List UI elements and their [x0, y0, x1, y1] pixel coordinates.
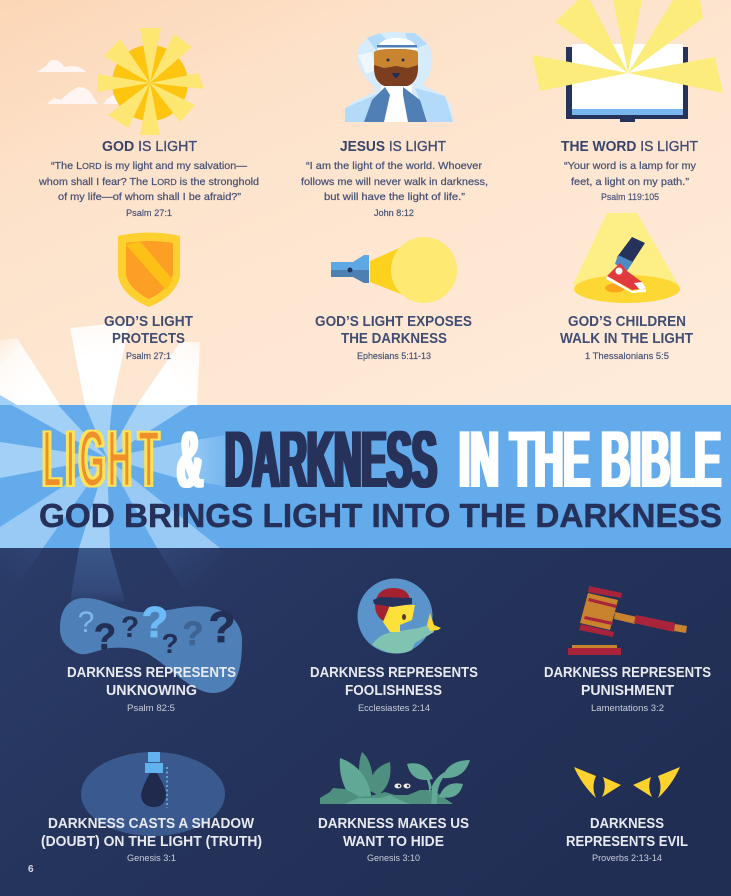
- reference: Proverbs 2:13-14: Proverbs 2:13-14: [592, 853, 662, 864]
- heading: darkness represents evil: REPRESENTS EVIL: [566, 834, 688, 850]
- reference: 1 Thessalonians 5:5: 1 Thessalonians 5:5: [585, 351, 669, 362]
- heading: darkness represents unknowing: UNKNOWING: [106, 683, 197, 699]
- verse: John 8:12: John 8:12: [374, 208, 414, 219]
- icon: thought blob with question marks: [60, 598, 242, 693]
- verse: Psalm 119:105: Psalm 119:105: [601, 192, 659, 203]
- verse: John 8:12: but will have the light of life.”: [324, 191, 466, 203]
- heading: God's light exposes the darkness: GOD’S LIGHT EXPOSES: [315, 314, 472, 330]
- icon: sneaker in spotlight: [573, 213, 680, 303]
- heading: darkness represents unknowing: DARKNESS REPRESENTS: [67, 665, 236, 681]
- heading: darkness makes us want to hide: DARKNESS MAKES US: [318, 816, 469, 832]
- verse: Psalm 119:105: [564, 160, 697, 203]
- heading: darkness represents foolishness: [310, 665, 478, 699]
- title: Light & Darkness in the Bible: DARKNESS: [225, 415, 437, 505]
- icon: thought blob with question marks: ?: [209, 603, 235, 652]
- verse: Psalm 119:105: feet, a light on my path.”: [571, 176, 690, 188]
- reference: Psalm 82:5: Psalm 82:5: [127, 703, 175, 714]
- heading: darkness represents punishment: PUNISHMENT: [581, 683, 674, 699]
- heading: God's children walk in the light: GOD’S CHILDREN: [568, 314, 686, 330]
- verse: Psalm 27:1: [38, 160, 259, 219]
- icon: flashlight beam: [331, 237, 457, 303]
- icon: dark lightbulb in shadow: [81, 752, 225, 836]
- reference: Genesis 3:1: Genesis 3:1: [127, 853, 176, 864]
- heading: darkness casts a shadow: DARKNESS CASTS A SHADOW: [48, 816, 254, 832]
- heading: darkness represents punishment: DARKNESS REPRESENTS: [544, 665, 711, 681]
- background: blue title band: [0, 405, 731, 548]
- heading: darkness represents punishment: [544, 665, 711, 699]
- panel: God's light protects: [104, 232, 193, 362]
- icon: yellow eyes: [574, 767, 680, 798]
- panel: darkness represents punishment: [544, 586, 711, 714]
- panel: God's light exposes the darkness: [315, 237, 472, 362]
- panel: darkness represents unknowing: [60, 598, 242, 714]
- icon: clouds: [37, 60, 125, 104]
- heading: darkness represents unknowing: [67, 665, 236, 699]
- title: Light & Darkness in the Bible: &: [177, 415, 203, 505]
- panel: darkness casts a shadow: [41, 752, 262, 864]
- heading: darkness represents evil: [566, 816, 688, 850]
- icon: shield: [118, 232, 180, 307]
- icon: open book with rays: [532, 0, 723, 122]
- heading: God's light protects: GOD’S LIGHT: [104, 314, 193, 330]
- panel: God's children walk in the light: [560, 213, 693, 362]
- verse: Psalm 119:105: “Your word is a lamp for my: [564, 160, 697, 172]
- heading: darkness represents foolishness: FOOLISHNESS: [345, 683, 442, 699]
- icon: sun: [97, 28, 204, 135]
- verse: Psalm 27:1: of my life—of whom shall I be afraid?”: [58, 191, 242, 203]
- icon: thought blob with question marks: ?: [161, 628, 179, 659]
- heading: darkness makes us want to hide: WANT TO HIDE: [343, 834, 444, 850]
- verse: John 8:12: follows me will never walk in darkness,: [301, 176, 488, 188]
- light burst rays across the three zones: [0, 322, 265, 602]
- icon: thought blob with question marks: ?: [94, 616, 116, 657]
- verse: John 8:12: [301, 160, 488, 219]
- heading: God's children walk in the light: WALK IN THE LIGHT: [560, 331, 693, 347]
- icon: eyes hiding in bushes: [320, 752, 470, 804]
- heading: darkness casts a shadow: [41, 816, 262, 850]
- heading: darkness represents foolishness: DARKNESS REPRESENTS: [310, 665, 478, 681]
- heading: God's light exposes the darkness: [315, 314, 472, 347]
- heading: God's children walk in the light: [560, 314, 693, 347]
- icon: thought blob with question marks: ?: [142, 598, 168, 647]
- reference: Psalm 27:1: Psalm 27:1: [126, 351, 171, 362]
- reference: Ephesians 5:11-13: Ephesians 5:11-13: [357, 351, 431, 362]
- verse: Psalm 27:1: Psalm 27:1: [126, 208, 172, 219]
- reference: Ecclesiastes 2:14: Ecclesiastes 2:14: [358, 703, 430, 714]
- panel: darkness represents evil: [566, 767, 688, 864]
- heading: darkness represents evil: DARKNESS: [590, 816, 664, 832]
- icon: thought blob with question marks: ?: [121, 611, 139, 644]
- page number: 6: [28, 864, 34, 875]
- heading: God's light exposes the darkness: THE DARKNESS: [341, 331, 447, 347]
- icon: thought blob with question marks: ?: [183, 615, 203, 653]
- heading: God's light protects: [104, 314, 193, 347]
- heading: darkness makes us want to hide: [318, 816, 469, 850]
- verse: Psalm 27:1: “The LORD is my light and my salvation—: [51, 160, 248, 172]
- heading: God's light protects: PROTECTS: [112, 331, 185, 347]
- background: navy lower half: [0, 548, 731, 896]
- heading: God is light: GOD IS LIGHT: [102, 139, 197, 155]
- reference: Genesis 3:10: Genesis 3:10: [367, 853, 420, 864]
- title: Light & Darkness in the Bible: LIGHT: [43, 417, 159, 502]
- icon: gavel: [568, 586, 687, 655]
- panel: darkness makes us want to hide: [318, 752, 470, 864]
- verse: Psalm 27:1: whom shall I fear? The L ORD is the stronghold: [38, 176, 259, 188]
- panel: God is light: [37, 28, 259, 219]
- verse: John 8:12: “I am the light of the world. Whoever: [306, 160, 483, 172]
- panel: The Word is light: [532, 0, 723, 203]
- heading: Jesus is light: JESUS IS LIGHT: [340, 139, 446, 155]
- icon: Jesus figure: [345, 32, 453, 122]
- icon: thought blob with question marks: ?: [78, 606, 94, 639]
- icon: blindfolded person: [358, 578, 441, 654]
- reference: Lamentations 3:2: Lamentations 3:2: [591, 703, 664, 714]
- heading: darkness casts a shadow: (DOUBT) ON THE LIGHT (TRUTH): [41, 834, 262, 850]
- title: Light & Darkness in the Bible: [43, 415, 721, 505]
- heading: The Word is light: THE WORD IS LIGHT: [561, 139, 698, 155]
- background: peach upper half: [0, 0, 731, 405]
- panel: darkness represents foolishness: [310, 578, 478, 714]
- panel: Jesus is light: [301, 32, 488, 219]
- subtitle: GOD BRINGS LIGHT INTO THE DARKNESS: [39, 497, 722, 534]
